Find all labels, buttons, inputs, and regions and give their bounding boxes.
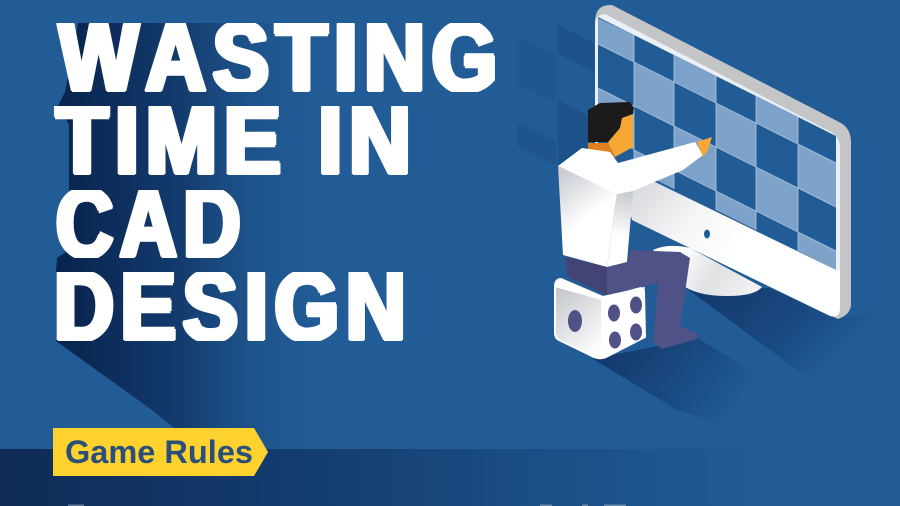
screen (598, 17, 836, 270)
title long shadow (56, 23, 498, 450)
bottom dark band (0, 449, 900, 506)
monitor right side (838, 142, 851, 319)
screen grid lines (598, 35, 836, 251)
person (558, 102, 712, 349)
die (555, 279, 645, 358)
die left face (555, 286, 602, 358)
hand (697, 137, 712, 157)
trousers (565, 250, 698, 349)
monitor (595, 5, 851, 319)
banner label: Game Rules (65, 434, 253, 470)
faded checker shadow behind monitor (517, 25, 594, 165)
monitor frame (595, 5, 851, 319)
cut-off text slivers at the bottom edge (68, 504, 626, 506)
hair (588, 102, 634, 142)
webcam dot (704, 230, 710, 238)
seat shade (565, 257, 607, 295)
torso (558, 166, 617, 267)
die top (555, 279, 644, 320)
screen edge (595, 14, 840, 300)
die shadow (593, 338, 790, 424)
neck (588, 143, 615, 158)
face (608, 114, 633, 157)
screen light tiles (598, 18, 836, 270)
monitor stand base (653, 246, 762, 296)
game rules banner (53, 428, 268, 476)
monitor shadow (686, 288, 900, 395)
die dots (568, 296, 642, 348)
shirt shoulders and arm (558, 142, 703, 194)
torso right side (607, 191, 633, 267)
die right face (602, 288, 645, 358)
monitor chin (620, 165, 840, 317)
